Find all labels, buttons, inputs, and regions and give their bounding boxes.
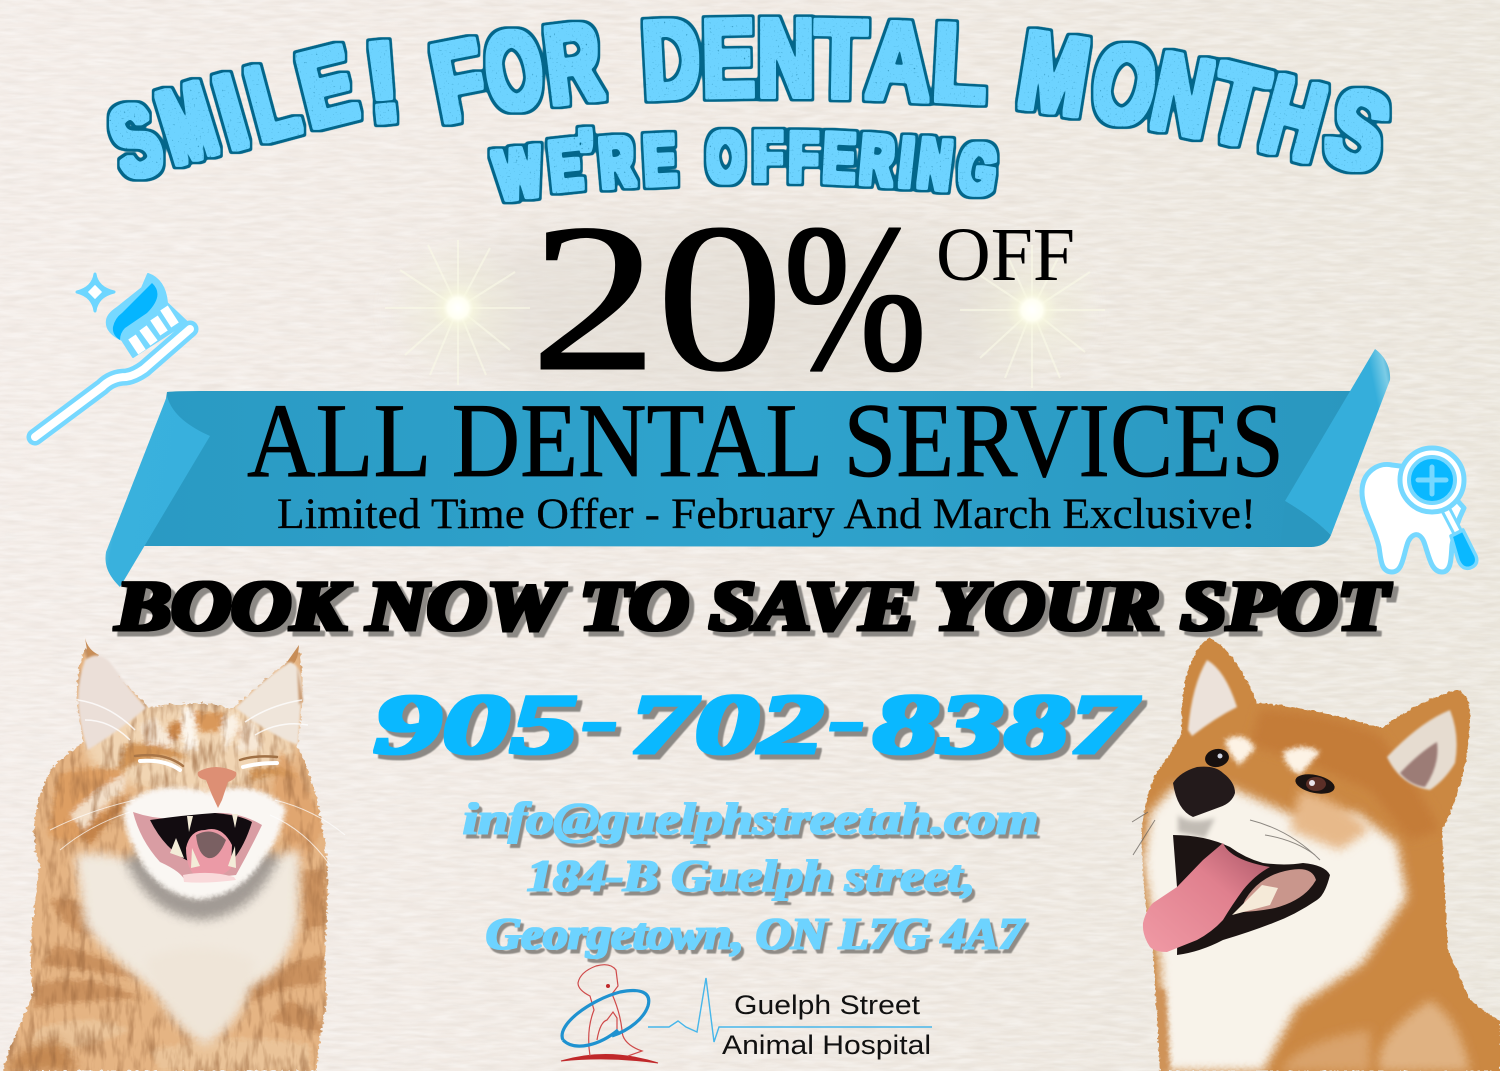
subtitle: We're offering: R [857, 120, 897, 201]
title: Smile! For Dental Months: S [97, 81, 175, 202]
cat mouth [133, 812, 262, 883]
banner heading: ALL DENTAL SERVICES [247, 382, 1284, 499]
subtitle: We're offering [490, 114, 1002, 215]
subtitle: We're offering: W [490, 131, 547, 215]
title: Smile! For Dental Months: A [864, 0, 934, 125]
headline: 20% off: 20 [531, 180, 783, 415]
icon: toothbrush [35, 274, 190, 437]
contact: email and address [463, 793, 1038, 959]
phone number: - [583, 675, 617, 762]
contact: email and address: 184-B Guelph street, [527, 850, 975, 901]
sparkle left [385, 238, 530, 385]
subtitle: We're offering: E [822, 118, 857, 198]
title: Smile! For Dental Months: M [147, 61, 228, 188]
title: Smile! For Dental Months: E [701, 0, 755, 121]
headline: 20% off: OFF [936, 213, 1075, 297]
subtitle: We're offering: F [788, 117, 818, 196]
ribbon right fold [1285, 349, 1390, 535]
title: Smile! For Dental Months: R [539, 0, 608, 129]
title: Smile! For Dental Months: E [288, 23, 367, 150]
subtitle: We're offering: F [754, 117, 782, 195]
title: Smile! For Dental Months: F [423, 17, 495, 146]
sparkle right [960, 240, 1105, 388]
title: Smile! For Dental Months: L [236, 39, 309, 164]
phone number: 8387 [873, 676, 1140, 772]
subtitle: We're offering: I [896, 123, 917, 202]
title: Smile! For Dental Months [97, 0, 1404, 202]
dog nose [1173, 767, 1235, 817]
logo: hospital name: Animal Hospital [722, 1030, 931, 1060]
cat nose [198, 767, 236, 808]
headline: 20% off: % [784, 180, 926, 415]
title: Smile! For Dental Months: O [1083, 20, 1165, 152]
title: Smile! For Dental Months: M [1011, 9, 1096, 140]
dog ears [1188, 660, 1457, 790]
cat fur body [0, 630, 340, 1071]
subtitle: We're offering: R [597, 121, 637, 203]
cat eyes [135, 755, 277, 770]
phone number: - [830, 675, 864, 762]
phone number [374, 675, 1140, 772]
subtitle: We're offering: N [914, 124, 955, 205]
title: Smile! For Dental Months: N [758, 0, 814, 120]
title: Smile! For Dental Months: H [1251, 53, 1337, 186]
title: Smile! For Dental Months: N [1142, 30, 1223, 162]
contact: email and address: info@guelphstreetah.com [463, 793, 1038, 844]
dog white face and chest [1143, 787, 1407, 1071]
illustration: smiling cat [0, 630, 345, 1071]
cat whiskers [50, 800, 345, 865]
contact: email and address: Georgetown, ON L7G 4A7 [486, 908, 1025, 959]
headline: 20% off [531, 180, 1075, 415]
illustration: happy dog [1130, 630, 1500, 1071]
logo: hospital name [722, 990, 931, 1060]
logo: hospital name: Guelph Street [734, 990, 921, 1020]
title: Smile! For Dental Months: ! [359, 17, 407, 147]
hospital logo [561, 965, 932, 1063]
logo: heartbeat line [648, 978, 932, 1042]
subtitle: We're offering: O [707, 117, 745, 197]
call to action: BOOK NOW TO SAVE YOUR SPOT [115, 566, 1391, 646]
title: Smile! For Dental Months: S [1312, 62, 1404, 197]
icon: sparkle star [77, 274, 114, 311]
cat chest and muzzle [75, 787, 300, 1045]
title: Smile! For Dental Months: L [930, 2, 990, 127]
subtitle: We're offering: G [954, 128, 1002, 211]
title: Smile! For Dental Months: T [814, 0, 867, 121]
phone number: 905 [374, 676, 578, 772]
dog mouth [1173, 835, 1330, 955]
cat ears [78, 638, 308, 750]
logo: dog and cat mark [561, 965, 658, 1063]
dog body [1130, 630, 1500, 1071]
banner subheading: Limited Time Offer - February And March Exclusive! [277, 491, 1256, 538]
title: Smile! For Dental Months: T [1198, 39, 1278, 171]
title: Smile! For Dental Months: O [477, 5, 551, 136]
ribbon banner [106, 349, 1390, 587]
icon: tooth with magnifier [1362, 448, 1477, 572]
title: Smile! For Dental Months: I [203, 53, 259, 172]
dog tongue [1143, 843, 1270, 952]
subtitle: We're offering: E [642, 120, 677, 200]
subtitle: We're offering: E [546, 124, 585, 206]
dog eyes [1204, 747, 1336, 797]
ribbon left fold [106, 396, 210, 587]
dog whiskers [1132, 812, 1320, 860]
phone number: 702 [630, 676, 824, 772]
title: Smile! For Dental Months: D [639, 0, 703, 123]
subtitle: We're offering: ’ [575, 114, 600, 194]
